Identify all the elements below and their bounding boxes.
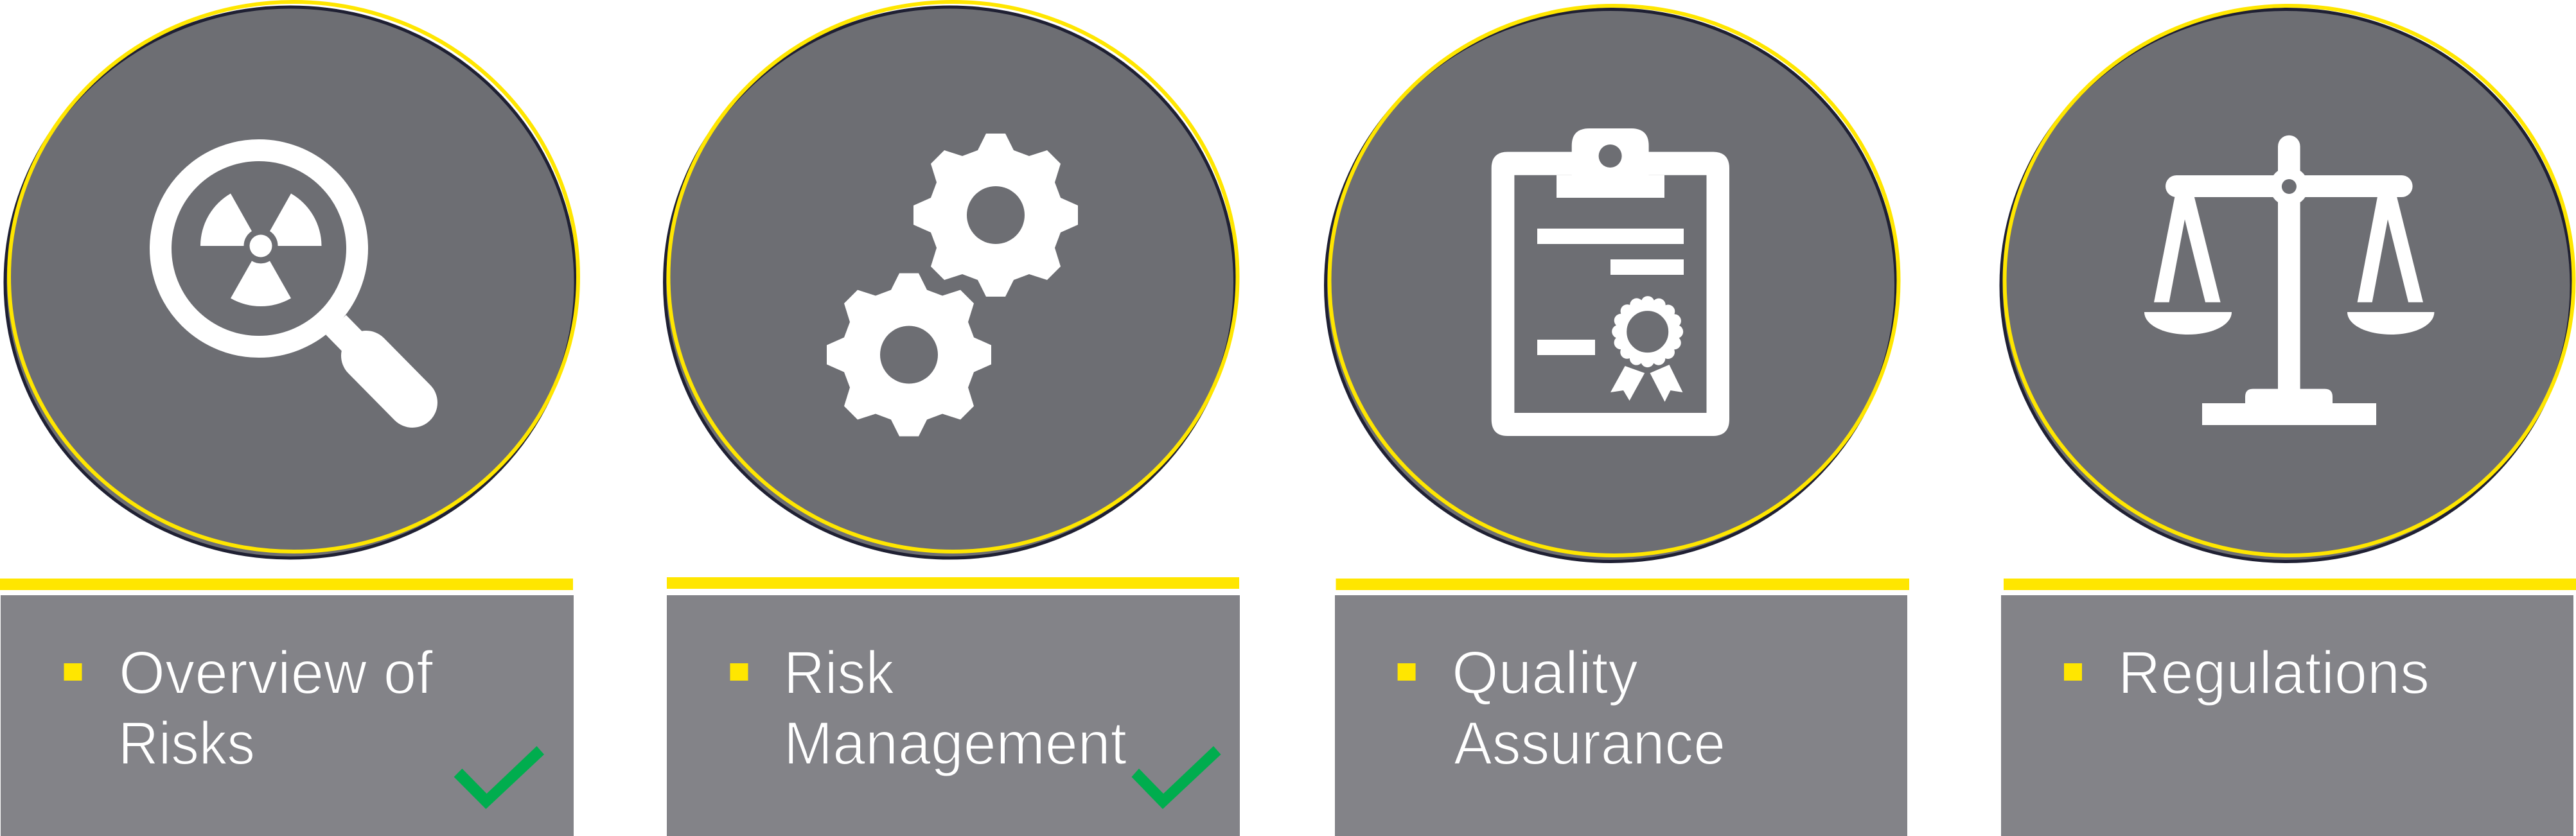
- icon: green check mark: [454, 746, 544, 809]
- yellow bar: [2004, 579, 2576, 590]
- bullet: [2064, 663, 2082, 681]
- label text: Regulations: Regulations: [2118, 639, 2430, 707]
- circle badge: regulations: [2001, 6, 2573, 561]
- icon: balance scales: [2144, 135, 2434, 425]
- circle badge: risk management: [664, 2, 1237, 558]
- panel: quality assurance: [1326, 6, 1909, 836]
- label text: Overview of Risks: Risks: [118, 710, 255, 778]
- label text: Quality Assurance: Assurance: [1454, 710, 1725, 778]
- icon: magnifying glass with radiation symbol: [161, 150, 412, 403]
- icon: green check mark: [1132, 746, 1221, 809]
- icon: clipboard with certificate seal: [1492, 128, 1729, 436]
- yellow bar: [667, 577, 1239, 589]
- bullet: [64, 663, 82, 681]
- label text: Risk Management: Management: [784, 710, 1127, 778]
- icon: two gears: [827, 134, 1078, 437]
- panel: regulations: [2001, 6, 2576, 836]
- label text: Quality Assurance: Quality: [1452, 639, 1638, 707]
- label box: [1, 595, 574, 836]
- bullet: [730, 663, 748, 681]
- label text: Overview of Risks: [118, 639, 434, 778]
- circle badge: quality assurance: [1326, 6, 1899, 561]
- label text: Risk Management: [784, 639, 1127, 778]
- yellow bar: [1336, 579, 1909, 590]
- label box: [1335, 595, 1907, 836]
- label box: [2001, 595, 2573, 836]
- yellow bar: [0, 579, 573, 590]
- label text: Overview of Risks: Overview of: [119, 639, 434, 707]
- label text: Risk Management: Risk: [784, 639, 894, 707]
- label box: [667, 595, 1240, 836]
- label text: Quality Assurance: [1452, 639, 1725, 778]
- bullet: [1398, 663, 1416, 681]
- panel: overview of risks: [0, 2, 578, 836]
- circle badge: overview of risks: [5, 2, 578, 558]
- panel: risk management: [664, 2, 1240, 836]
